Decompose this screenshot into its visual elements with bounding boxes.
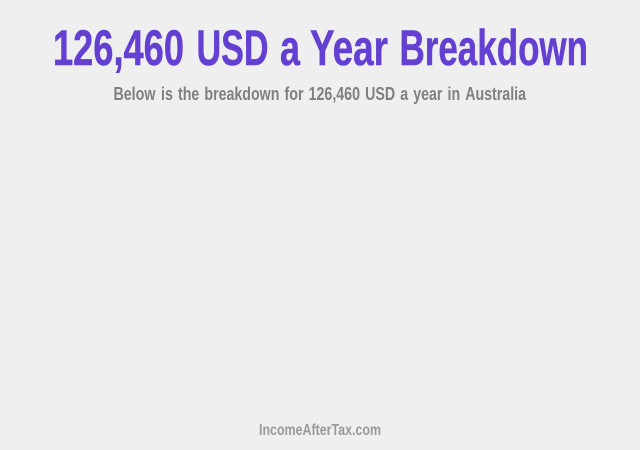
- footer: site name: IncomeAfterTax.com: [259, 422, 381, 439]
- title: [53, 20, 588, 76]
- subtitle: is: [161, 84, 173, 104]
- subtitle: the: [178, 84, 199, 104]
- subtitle: for: [284, 84, 304, 104]
- title: a: [280, 20, 301, 76]
- title: 126,460: [53, 20, 184, 76]
- title: USD: [196, 20, 268, 76]
- subtitle: USD: [365, 84, 395, 104]
- subtitle: Australia: [465, 84, 527, 104]
- subtitle: year: [413, 84, 442, 104]
- subtitle: in: [448, 84, 460, 104]
- title: Year: [310, 20, 388, 76]
- subtitle: breakdown: [204, 84, 279, 104]
- subtitle: a: [400, 84, 409, 104]
- subtitle: Below: [114, 84, 156, 104]
- subtitle: [114, 84, 527, 104]
- subtitle: 126,460: [309, 84, 360, 104]
